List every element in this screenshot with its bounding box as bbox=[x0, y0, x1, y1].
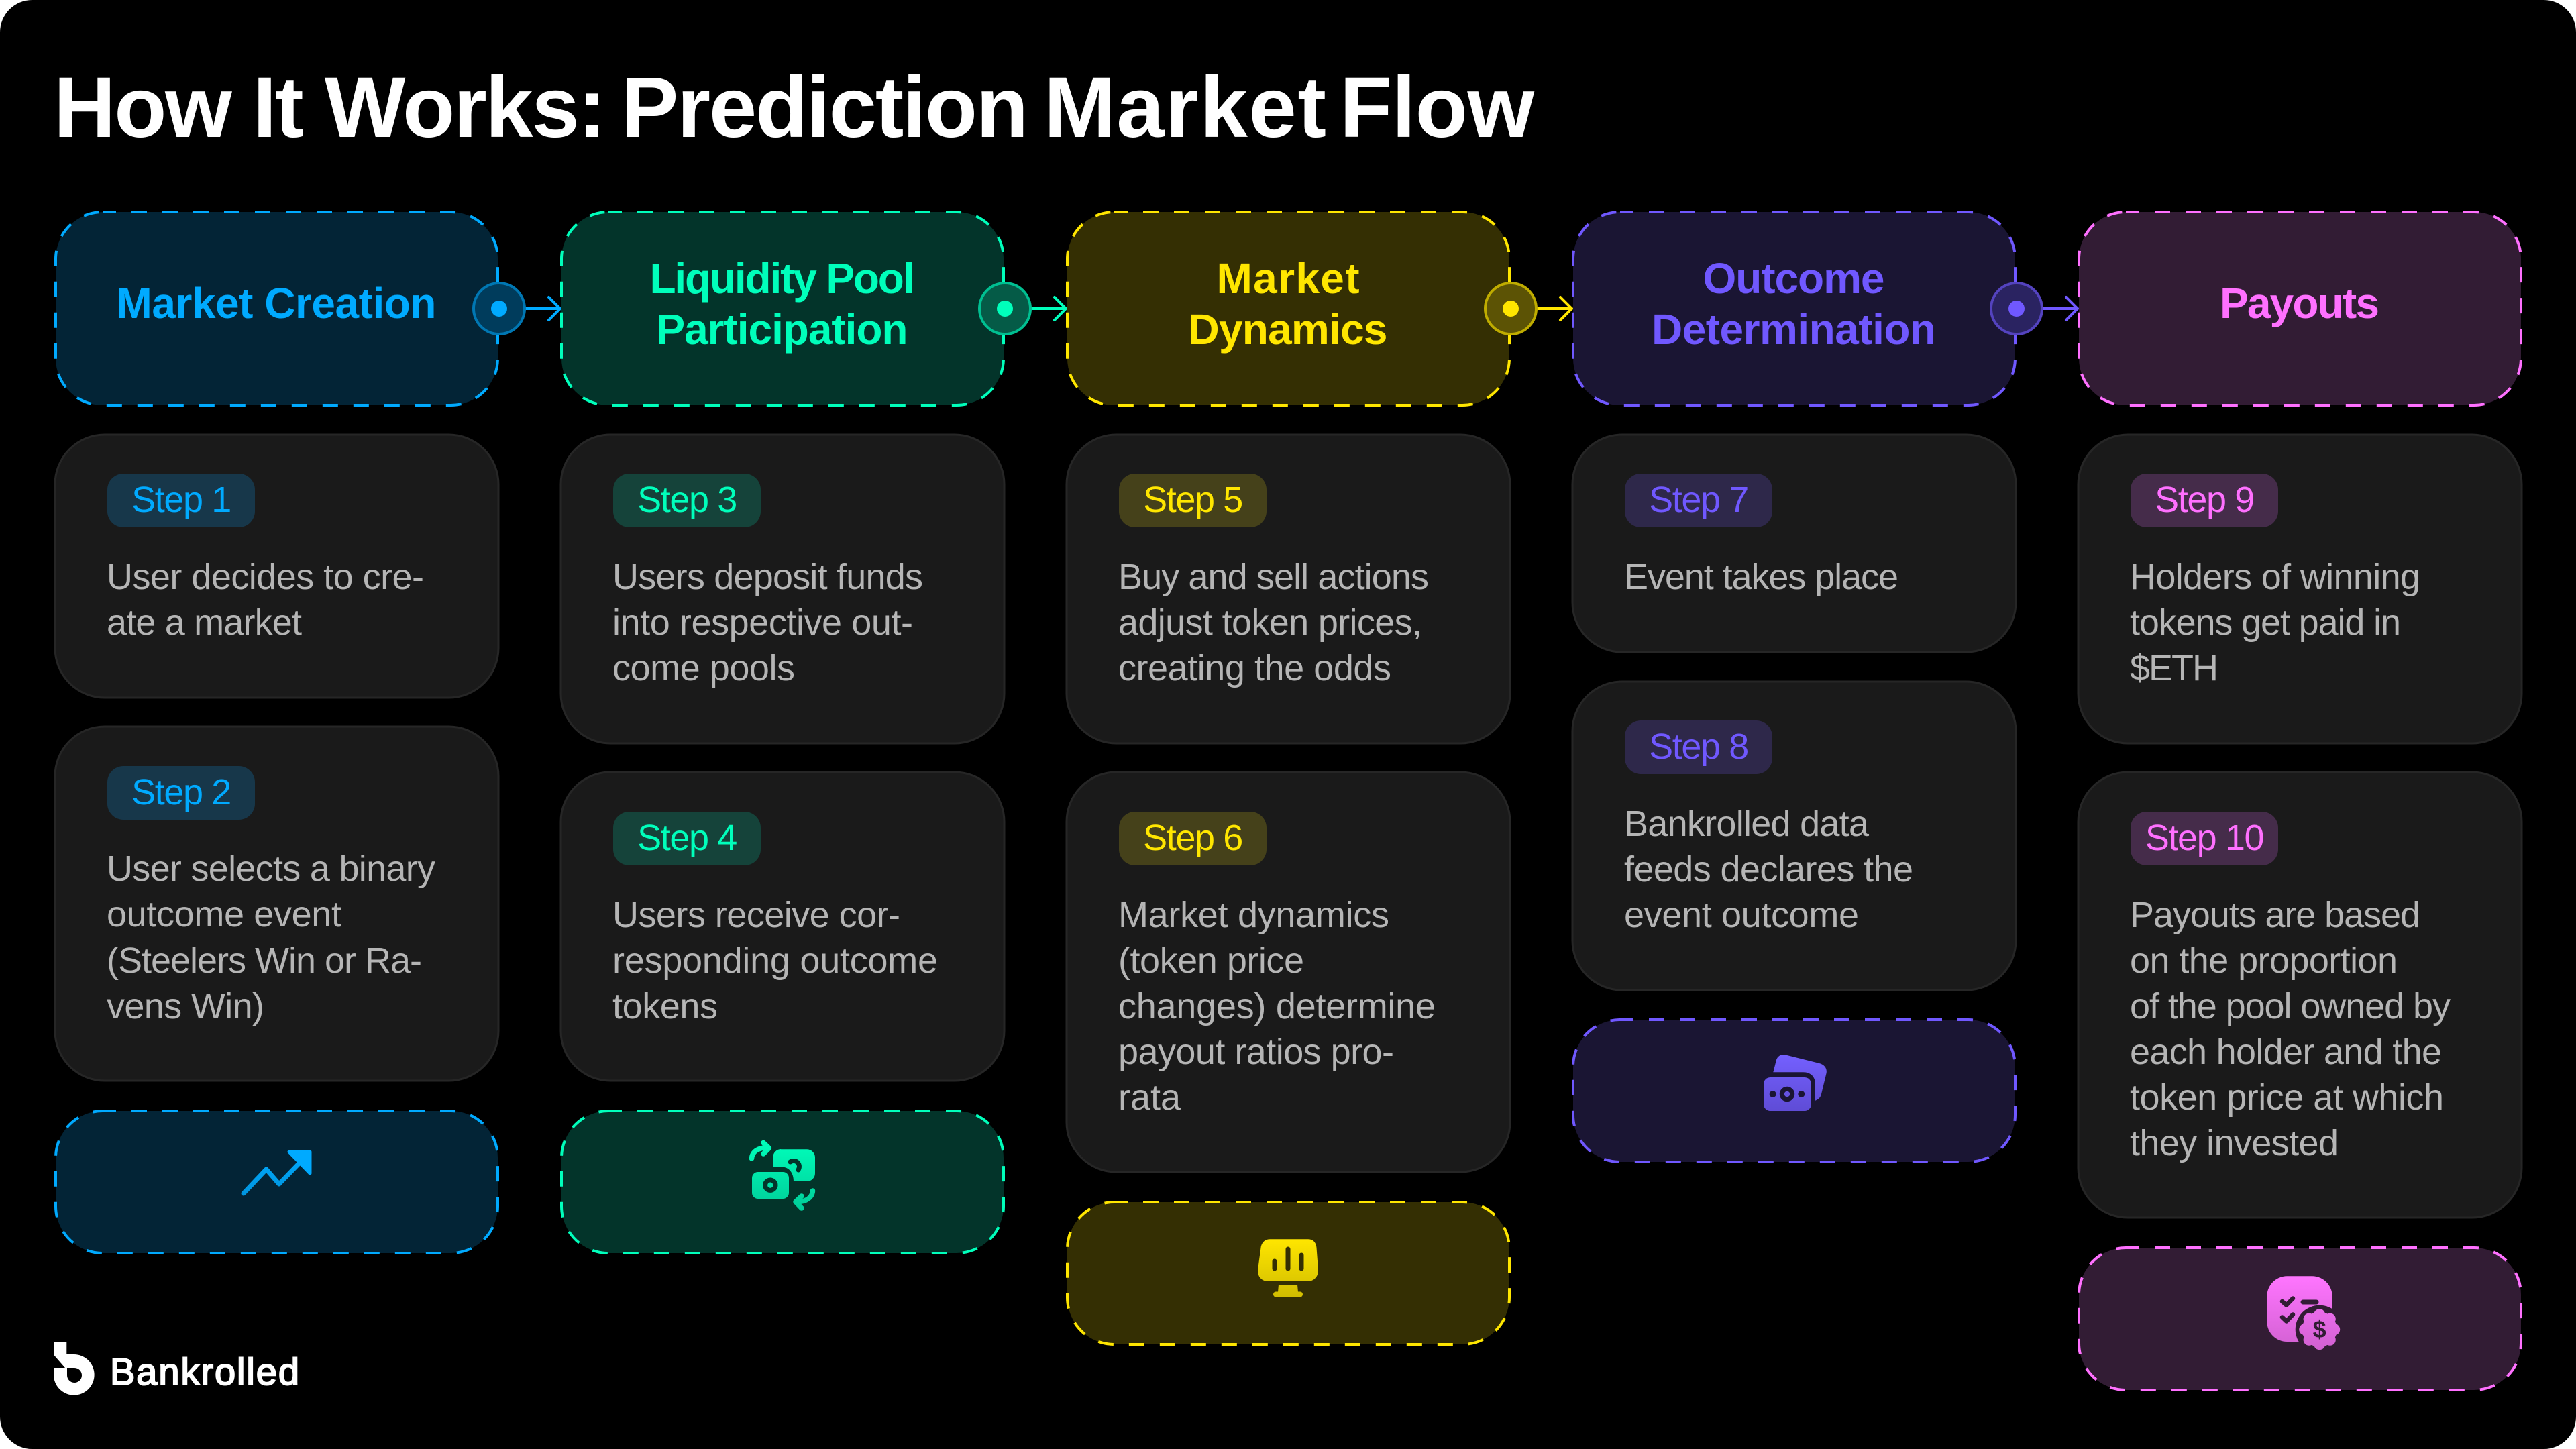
text: step 8: event outcome bbox=[1624, 895, 1859, 935]
chip: step 9: Step 9 bbox=[2155, 480, 2254, 520]
icon: trending arrow bbox=[244, 1152, 310, 1193]
text: step 8: feeds declares the bbox=[1624, 849, 1913, 890]
text: step 10: each holder and the bbox=[2130, 1032, 2442, 1072]
text: step 2 bbox=[107, 849, 435, 1026]
text: step 5: creating the odds bbox=[1118, 648, 1391, 688]
text: step 9: tokens get paid in bbox=[2130, 602, 2401, 643]
card: step 6 bbox=[1067, 772, 1510, 1172]
text: step 3: Users deposit funds bbox=[612, 557, 923, 597]
text: step 2: vens Win) bbox=[107, 986, 264, 1026]
text: step 1: ate a market bbox=[107, 602, 302, 643]
header: Payouts: Payouts bbox=[2220, 279, 2379, 327]
text: step 3: into respective out- bbox=[612, 602, 913, 643]
card: step 8 bbox=[1572, 682, 2016, 990]
header: Liquidity Pool Participation bbox=[561, 212, 1004, 405]
text: step 10: they invested bbox=[2130, 1123, 2339, 1163]
chip: step 6 bbox=[1119, 812, 1267, 865]
text: step 2: (Steelers Win or Ra- bbox=[107, 941, 422, 981]
card: step 4 bbox=[561, 772, 1004, 1081]
connector arrow: column 3 to 4 bbox=[1485, 283, 1572, 334]
card: step 7 bbox=[1572, 435, 2016, 652]
header: Outcome Determination: Determination bbox=[1652, 305, 1936, 354]
card: step 5 bbox=[1067, 435, 1510, 743]
card: step 9 bbox=[2078, 435, 2522, 743]
text: step 10: of the pool owned by bbox=[2130, 986, 2451, 1026]
icon: checklist with dollar badge: $ bbox=[2313, 1316, 2326, 1343]
text: step 6: Market dynamics bbox=[1118, 895, 1389, 935]
text: step 1 bbox=[107, 557, 424, 643]
chip: step 2: Step 2 bbox=[131, 772, 231, 812]
text: step 5: adjust token prices, bbox=[1118, 602, 1422, 643]
header: Market Dynamics: Market bbox=[1217, 254, 1359, 303]
title: Market bbox=[1044, 60, 1326, 156]
text: step 4 bbox=[612, 895, 938, 1026]
header: Outcome Determination bbox=[1573, 212, 2015, 405]
text: step 6: changes) determine bbox=[1118, 986, 1436, 1026]
icon box: trending chart bbox=[56, 1111, 498, 1253]
chip: step 9 bbox=[2131, 474, 2278, 527]
text: step 2: User selects a binary bbox=[107, 849, 435, 889]
chip: step 10 bbox=[2131, 812, 2278, 865]
text: step 4: responding outcome bbox=[612, 941, 938, 981]
header: Market Dynamics: Dynamics bbox=[1189, 305, 1387, 354]
title: How It Works: bbox=[54, 60, 606, 156]
header: Market Creation: Market Creation bbox=[117, 279, 436, 327]
text: step 10 bbox=[2130, 895, 2451, 1163]
card: step 3 bbox=[561, 435, 1004, 743]
header: Liquidity Pool Participation: Liquidity Pool bbox=[649, 254, 915, 303]
header: Liquidity Pool Participation: Participation bbox=[656, 305, 908, 354]
chip: step 4: Step 4 bbox=[637, 818, 737, 858]
wordmark: Bankrolled bbox=[110, 1350, 299, 1393]
chip: step 7: Step 7 bbox=[1649, 480, 1748, 520]
column: Payouts bbox=[2078, 212, 2522, 1390]
icon box: monitor chart bbox=[1067, 1202, 1509, 1344]
title bbox=[54, 60, 1534, 156]
connector arrow: column 4 to 5 bbox=[1991, 283, 2078, 334]
icon: monitor chart bbox=[1258, 1239, 1318, 1297]
text: step 6: payout ratios pro- bbox=[1118, 1032, 1394, 1072]
chip: step 5: Step 5 bbox=[1143, 480, 1242, 520]
text: step 9: Holders of winning bbox=[2130, 557, 2420, 597]
card: step 1 bbox=[55, 435, 498, 698]
text: step 2: outcome event bbox=[107, 894, 341, 934]
text: step 9: $ETH bbox=[2130, 648, 2218, 688]
icon: banknotes bbox=[1764, 1055, 1827, 1111]
chip: step 10: Step 10 bbox=[2145, 818, 2263, 858]
text: step 5 bbox=[1118, 557, 1429, 688]
icon: money exchange bbox=[751, 1143, 815, 1208]
text: step 9 bbox=[2130, 557, 2420, 688]
column: Liquidity Pool Participation bbox=[561, 212, 1004, 1253]
text: step 7: Event takes place bbox=[1624, 557, 1898, 597]
icon: Bankrolled mark bbox=[54, 1342, 95, 1395]
text: step 8 bbox=[1624, 804, 1913, 935]
text: step 6: (token price bbox=[1118, 941, 1304, 981]
header: Market Dynamics bbox=[1067, 212, 1509, 405]
text: step 6: rata bbox=[1118, 1077, 1181, 1118]
chip: step 4 bbox=[613, 812, 761, 865]
title: Flow bbox=[1340, 60, 1534, 156]
text: step 5: Buy and sell actions bbox=[1118, 557, 1429, 597]
chip: step 1: Step 1 bbox=[131, 480, 231, 520]
text: step 3: come pools bbox=[612, 648, 795, 688]
connector arrow: column 2 to 3 bbox=[979, 283, 1066, 334]
logo: Bankrolled bbox=[54, 1342, 299, 1395]
chip: step 7 bbox=[1625, 474, 1772, 527]
icon: checklist with dollar badge bbox=[2267, 1276, 2344, 1354]
card: step 2 bbox=[55, 727, 498, 1081]
chip: step 3: Step 3 bbox=[637, 480, 737, 520]
column: Market Creation bbox=[55, 212, 498, 1253]
text: step 3 bbox=[612, 557, 923, 688]
text: step 10: token price at which bbox=[2130, 1077, 2444, 1118]
chip: step 8 bbox=[1625, 720, 1772, 774]
text: step 10: Payouts are based bbox=[2130, 895, 2420, 935]
chip: step 1 bbox=[107, 474, 255, 527]
text: step 8: Bankrolled data bbox=[1624, 804, 1870, 844]
chip: step 3 bbox=[613, 474, 761, 527]
chip: step 6: Step 6 bbox=[1143, 818, 1242, 858]
chip: step 8: Step 8 bbox=[1649, 727, 1748, 767]
column: Market Dynamics bbox=[1067, 212, 1510, 1344]
text: step 6 bbox=[1118, 895, 1436, 1118]
header: Outcome Determination: Outcome bbox=[1703, 254, 1885, 303]
chip: step 2 bbox=[107, 766, 255, 820]
icon box: banknotes bbox=[1573, 1020, 2015, 1162]
connector arrow: column 1 to 2 bbox=[474, 283, 560, 334]
card: step 10 bbox=[2078, 772, 2522, 1218]
text: step 4: Users receive cor- bbox=[612, 895, 900, 935]
header: Payouts bbox=[2079, 212, 2521, 405]
title: Prediction bbox=[621, 60, 1028, 156]
icon box: checklist with dollar badge bbox=[2079, 1248, 2521, 1390]
text: step 4: tokens bbox=[612, 986, 718, 1026]
column: Outcome Determination bbox=[1572, 212, 2016, 1162]
text: step 10: on the proportion bbox=[2130, 941, 2398, 981]
text: step 1: User decides to cre- bbox=[107, 557, 424, 597]
icon box: money exchange bbox=[561, 1111, 1004, 1253]
chip: step 5 bbox=[1119, 474, 1267, 527]
header: Market Creation bbox=[56, 212, 498, 405]
